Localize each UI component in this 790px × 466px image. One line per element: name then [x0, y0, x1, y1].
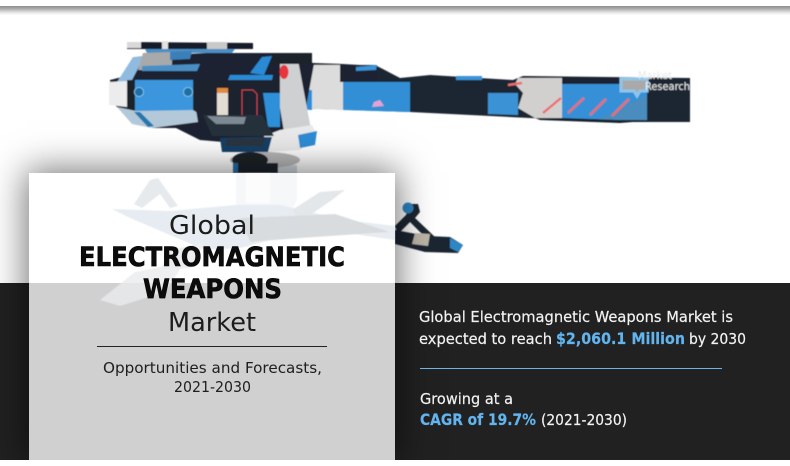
- market size statement: Global Electromagnetic Weapons Market is: [419, 308, 733, 326]
- logo watermark: Research: [645, 80, 690, 93]
- title divider: [97, 346, 327, 347]
- turret housing: [109, 41, 317, 152]
- CAGR statement: [420, 390, 627, 429]
- logo watermark: [621, 69, 690, 96]
- CAGR statement: (2021-2030): [541, 411, 627, 429]
- bottom white strip: [0, 460, 790, 466]
- column and rotating base: [230, 152, 300, 240]
- logo watermark: Market: [638, 69, 673, 82]
- market size statement: by 2030: [689, 330, 746, 348]
- market size statement: [419, 308, 746, 348]
- subtitle: Opportunities and Forecasts,: [103, 359, 322, 377]
- title: [79, 211, 345, 338]
- barrel: [290, 63, 690, 123]
- subtitle: 2021-2030: [174, 378, 251, 396]
- subtitle: [103, 359, 322, 396]
- CAGR statement: Growing at a: [420, 390, 513, 408]
- title: ELECTROMAGNETIC: [79, 242, 345, 273]
- top shadow bar: [0, 6, 790, 15]
- statement divider: [420, 368, 722, 369]
- mount foot on the right: [395, 202, 463, 253]
- title: WEAPONS: [143, 274, 282, 305]
- spider mount arms: [100, 178, 395, 306]
- market size statement: expected to reach: [419, 330, 552, 348]
- title: Global: [169, 211, 255, 241]
- market size statement: $2,060.1 Million: [556, 329, 685, 348]
- CAGR statement: CAGR of 19.7%: [420, 410, 536, 429]
- title: Market: [168, 308, 256, 338]
- dark lower band: [0, 283, 790, 460]
- title panel: [29, 173, 395, 460]
